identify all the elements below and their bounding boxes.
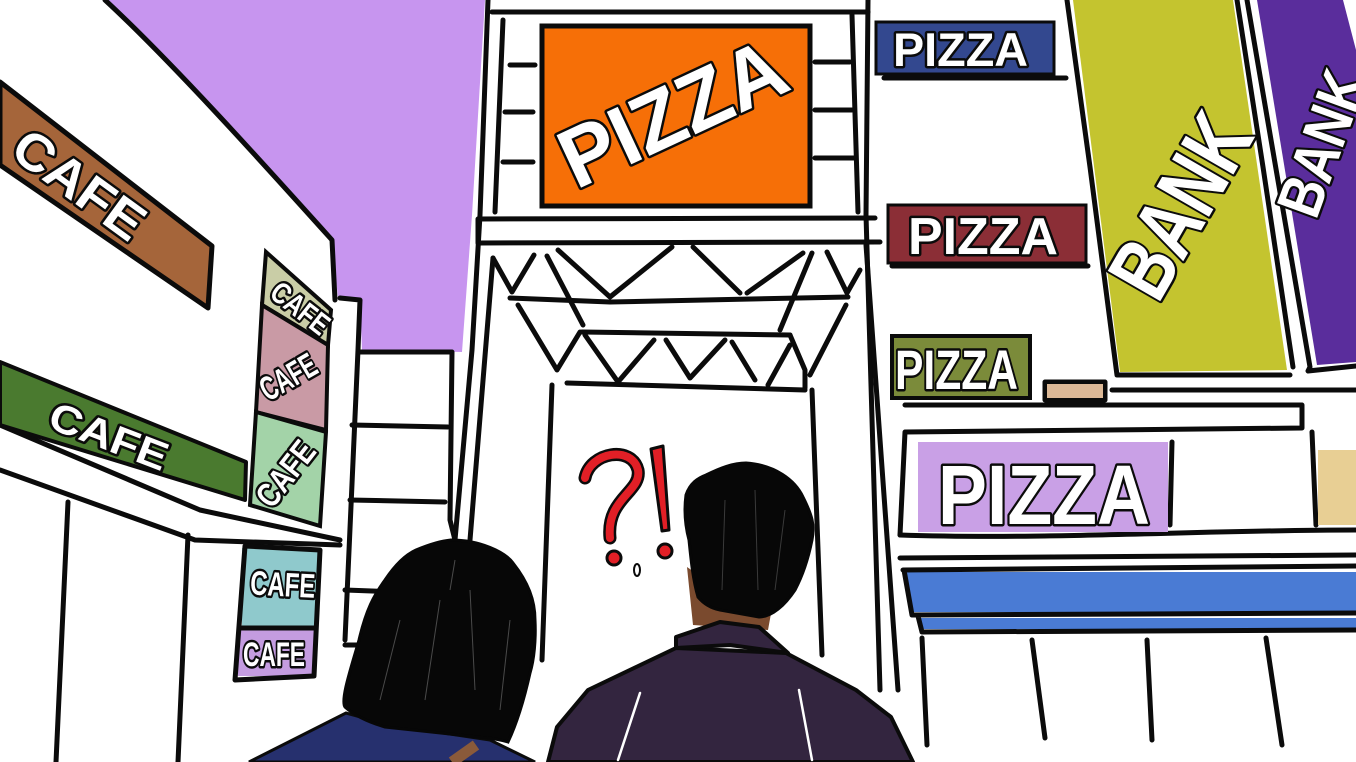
sign: green cafe: CAFE (43, 394, 174, 480)
central tower frame (455, 0, 898, 690)
sign: blue pizza (876, 22, 1066, 78)
sign: blue pizza: PIZZA (893, 23, 1028, 76)
beige sign edge (1318, 450, 1356, 525)
vertical cafe sign stack: CAFE (253, 346, 324, 409)
sign: purple bank (1247, 0, 1356, 371)
lower cafe signs: CAFE (243, 636, 305, 674)
right building lines (900, 382, 1356, 745)
truss (493, 247, 860, 660)
sign: olive-yellow bank (1067, 0, 1293, 375)
lower cafe signs: CAFE (249, 564, 316, 606)
sign: olive pizza: PIZZA (895, 338, 1018, 401)
back building (345, 352, 455, 645)
sign: olive-yellow bank: BANK (1089, 96, 1272, 314)
left building (0, 0, 360, 762)
sign: green cafe (0, 362, 246, 500)
red question and exclamation marks (585, 446, 672, 576)
vertical cafe sign stack: CAFE (264, 276, 336, 342)
man figure (548, 463, 913, 762)
vertical cafe sign stack (248, 252, 336, 526)
lower cafe signs (235, 546, 320, 680)
sign: lilac pizza: PIZZA (938, 448, 1150, 542)
woman figure (249, 540, 535, 762)
purple sky (105, 0, 485, 352)
orange pizza billboard: PIZZA (544, 20, 801, 206)
sign: maroon pizza: PIZZA (908, 208, 1058, 266)
sign: large brown cafe (0, 82, 212, 308)
small tan box (1047, 384, 1103, 398)
vertical cafe sign stack: CAFE (248, 433, 324, 515)
sign: large brown cafe: CAFE (1, 118, 156, 253)
blue awning (903, 566, 1356, 632)
